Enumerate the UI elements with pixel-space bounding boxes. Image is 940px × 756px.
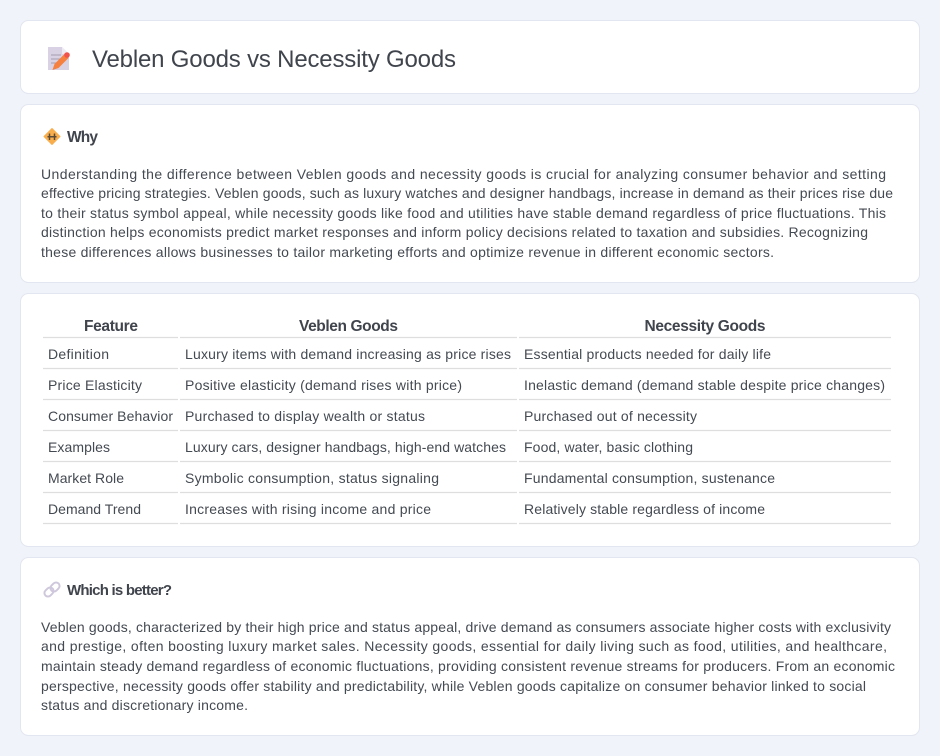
heading: which is better: Which is better? bbox=[67, 582, 172, 599]
row: demand trend bbox=[48, 501, 765, 517]
which is better paragraph: maintain steady demand regardless of economic fluctuations, providing consistent revenue streams for producers. From an economic bbox=[41, 658, 895, 674]
panel: comparison table bbox=[20, 294, 920, 546]
row: examples: Examples bbox=[48, 439, 110, 455]
row: demand trend: Relatively stable regardless of income bbox=[524, 501, 765, 517]
table header: Feature bbox=[84, 318, 138, 335]
row: definition: Essential products needed for daily life bbox=[524, 346, 771, 362]
row: examples: Food, water, basic clothing bbox=[524, 439, 693, 455]
which is better paragraph: and prestige, often boosting luxury market sales. Necessity goods, essential for daily living such as food, utilities, and healthcare, bbox=[41, 638, 887, 654]
table row lines bbox=[43, 338, 891, 524]
title text: Veblen Goods vs Necessity Goods bbox=[92, 46, 456, 73]
row: definition bbox=[48, 346, 771, 362]
why paragraph: distinction helps economists predict market responses and inform policy decisions related to taxation and subsidies. Recognizing bbox=[41, 224, 868, 240]
heading: why: Why bbox=[67, 129, 98, 146]
row: definition: Definition bbox=[48, 346, 109, 362]
icon: document with pencil bbox=[48, 47, 70, 70]
row: market role bbox=[48, 470, 775, 486]
table header: Necessity Goods bbox=[644, 318, 766, 335]
table header: Veblen Goods bbox=[299, 318, 398, 335]
row: market role: Symbolic consumption, status signaling bbox=[185, 470, 439, 486]
row: definition: Luxury items with demand increasing as price rises bbox=[185, 346, 511, 362]
which is better paragraph bbox=[41, 619, 895, 713]
row: market role: Market Role bbox=[48, 470, 124, 486]
row: price elasticity bbox=[48, 377, 885, 393]
why paragraph: Understanding the difference between Veblen goods and necessity goods is crucial for analyzing consumer behavior and setting bbox=[41, 166, 886, 182]
row: consumer behavior: Purchased to display wealth or status bbox=[185, 408, 425, 424]
why paragraph: effective pricing strategies. Veblen goods, such as luxury watches and designer handbags, increase in demand as their prices rise due bbox=[41, 185, 893, 201]
row: price elasticity: Positive elasticity (demand rises with price) bbox=[185, 377, 462, 393]
row: consumer behavior: Consumer Behavior bbox=[48, 408, 173, 424]
row: demand trend: Demand Trend bbox=[48, 501, 141, 517]
icon: chain link bbox=[43, 581, 61, 598]
why paragraph: to their status symbol appeal, while necessity goods like food and utilities have stable demand regardless of price fluctuations. This bbox=[41, 205, 886, 221]
row: examples bbox=[48, 439, 693, 455]
table header bbox=[84, 318, 766, 335]
panel: title bbox=[20, 20, 920, 94]
icon: diamond sign bbox=[44, 128, 60, 144]
row: price elasticity: Inelastic demand (demand stable despite price changes) bbox=[524, 377, 885, 393]
row: price elasticity: Price Elasticity bbox=[48, 377, 142, 393]
row: market role: Fundamental consumption, sustenance bbox=[524, 470, 775, 486]
row: demand trend: Increases with rising income and price bbox=[185, 501, 431, 517]
which is better paragraph: Veblen goods, characterized by their high price and status appeal, drive demand as consumers associate higher costs with exclusivity bbox=[41, 619, 891, 635]
row: consumer behavior bbox=[48, 408, 697, 424]
row: examples: Luxury cars, designer handbags, high-end watches bbox=[185, 439, 506, 455]
which is better paragraph: status and discretionary income. bbox=[41, 697, 248, 713]
why paragraph bbox=[41, 166, 893, 260]
which is better paragraph: perspective, necessity goods offer stability and predictability, while Veblen goods capitalize on consumer behavior linked to social bbox=[41, 678, 866, 694]
why paragraph: these differences allows businesses to tailor marketing efforts and optimize revenue in different economic sectors. bbox=[41, 244, 774, 260]
panel: which is better bbox=[20, 558, 920, 736]
row: consumer behavior: Purchased out of necessity bbox=[524, 408, 697, 424]
panel: why bbox=[20, 104, 920, 282]
